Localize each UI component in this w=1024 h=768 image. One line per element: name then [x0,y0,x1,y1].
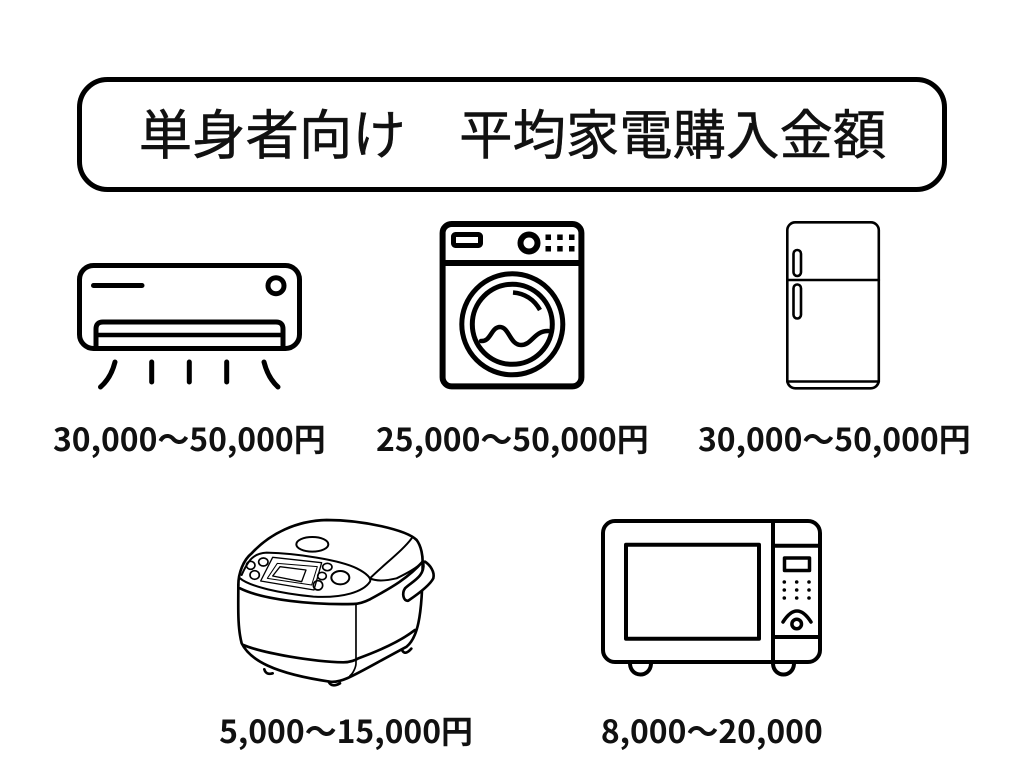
price: air conditioner: 30,000〜50,000円 [53,415,326,461]
price: refrigerator: 30,000〜50,000円 [698,415,971,461]
price: washing machine: 25,000〜50,000円 [376,415,649,461]
price: microwave oven: 8,000〜20,000 [601,707,823,753]
price: rice cooker: 5,000〜15,000円 [219,707,473,753]
icon: rice cooker [238,520,434,685]
icon: washing machine [443,224,581,386]
icon: microwave oven [603,521,820,674]
title banner [80,80,944,190]
icon: air conditioner [80,266,300,387]
icon: refrigerator [787,222,879,388]
title text: 単身者向け 平均家電購入金額 [139,93,886,170]
